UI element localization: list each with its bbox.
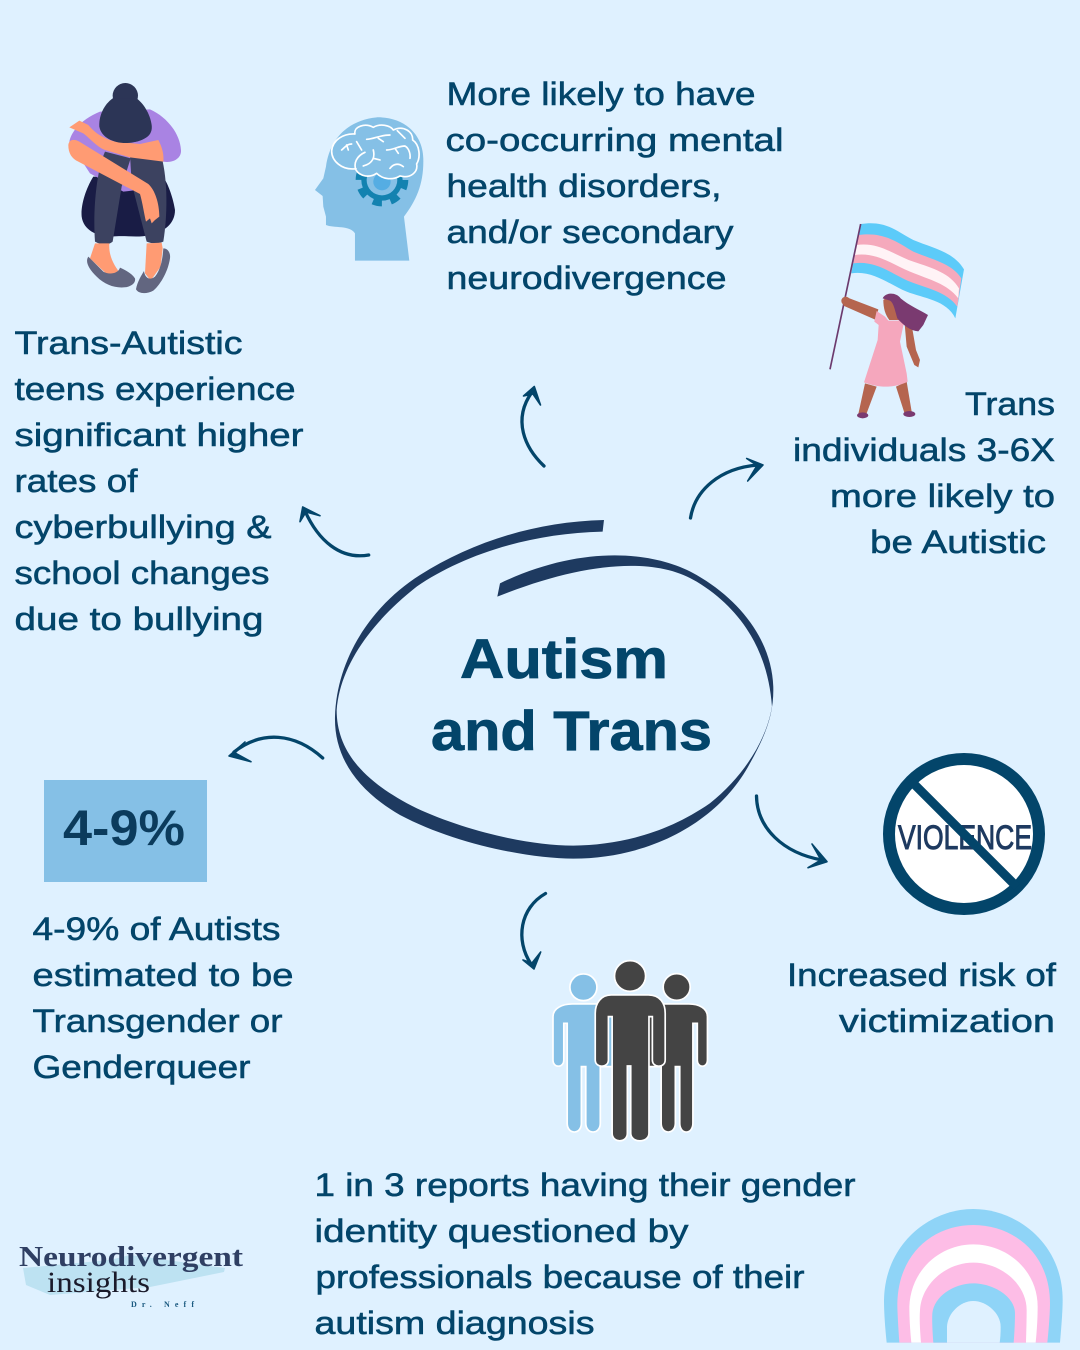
arrow: to violence <box>756 796 827 868</box>
text: trans-autistic teens cyberbullying: Trans-Autistic <box>14 325 242 361</box>
text: more likely to have co-occurring disorders: and/or secondary <box>446 214 734 250</box>
text: trans individuals 3-6X: more likely to <box>830 478 1055 514</box>
text: 4-9% of Autists <box>32 911 294 1085</box>
text: 1 in 3 reports: autism diagnosis <box>314 1305 594 1341</box>
text: 1 in 3 reports: 1 in 3 reports having their gender <box>314 1167 856 1203</box>
gear <box>359 157 405 203</box>
text: more likely to have co-occurring disorders: neurodivergence <box>446 260 726 296</box>
text: 1 in 3 reports: professionals because of their <box>316 1259 805 1295</box>
title: Autism and Trans <box>431 627 712 762</box>
text: trans individuals 3-6X: Trans <box>965 386 1055 422</box>
box: 4-9% <box>44 780 207 882</box>
icon: sitting woman hugging knees <box>68 83 181 293</box>
logo: Neurodivergent insights: Neurodivergent <box>19 1241 243 1273</box>
hand-drawn circle around title <box>335 520 773 859</box>
title: Autism and Trans: and Trans <box>431 699 712 762</box>
text: 4-9% of Autists: Genderqueer <box>32 1049 251 1085</box>
text: 1 in 3 reports <box>314 1167 856 1341</box>
icon: no violence sign <box>889 759 1039 909</box>
box: 4-9%: 4-9% <box>63 800 185 856</box>
text: trans individuals 3-6X: be Autistic <box>870 524 1046 560</box>
arrow: to 4-9% <box>229 737 323 762</box>
text: trans-autistic teens cyberbullying <box>14 325 304 637</box>
icon: no violence sign: VIOLENCE <box>898 819 1032 857</box>
icon: woman holding trans flag <box>830 223 964 418</box>
text: trans-autistic teens cyberbullying: cyberbullying & <box>14 509 272 545</box>
logo: Neurodivergent insights: insights <box>47 1266 150 1299</box>
text: 4-9% of Autists: estimated to be <box>32 957 294 993</box>
text: more likely to have co-occurring disorders: More likely to have <box>446 76 756 112</box>
arrow: to cyberbullying <box>300 507 369 556</box>
title: Autism and Trans: Autism <box>460 627 668 690</box>
brain outline <box>332 125 419 179</box>
arrow: up to mental health <box>522 386 544 466</box>
text: more likely to have co-occurring disorders: co-occurring mental <box>446 122 784 158</box>
arrow: to people <box>522 894 546 969</box>
text: trans individuals 3-6X <box>793 386 1055 560</box>
text: trans-autistic teens cyberbullying: teens experience <box>14 371 296 407</box>
text: 4-9% of Autists: Transgender or <box>32 1003 283 1039</box>
text: 4-9% of Autists: 4-9% of Autists <box>32 911 280 947</box>
text: more likely to have co-occurring disorders <box>446 76 784 296</box>
arrow: to trans flag <box>690 458 763 518</box>
icon: head with brain and gear <box>315 117 423 261</box>
text: trans-autistic teens cyberbullying: school changes <box>14 555 270 591</box>
text: trans-autistic teens cyberbullying: significant higher <box>14 417 304 453</box>
text: 1 in 3 reports: identity questioned by <box>314 1213 689 1249</box>
icon: trans-colored rainbow <box>884 1209 1063 1343</box>
text: trans-autistic teens cyberbullying: due to bullying <box>14 601 264 637</box>
icon: three people <box>553 961 707 1141</box>
text: increased risk of victimization <box>787 957 1057 1039</box>
text: increased risk of victimization: Increased risk of <box>787 957 1057 993</box>
text: trans-autistic teens cyberbullying: rates of <box>14 463 139 499</box>
text: more likely to have co-occurring disorders: health disorders, <box>446 168 722 204</box>
logo: Neurodivergent insights <box>19 1241 243 1309</box>
logo: Neurodivergent insights: Dr. Neff <box>131 1300 194 1309</box>
text: increased risk of victimization: victimization <box>839 1003 1055 1039</box>
text: trans individuals 3-6X: individuals 3-6X <box>793 432 1055 468</box>
